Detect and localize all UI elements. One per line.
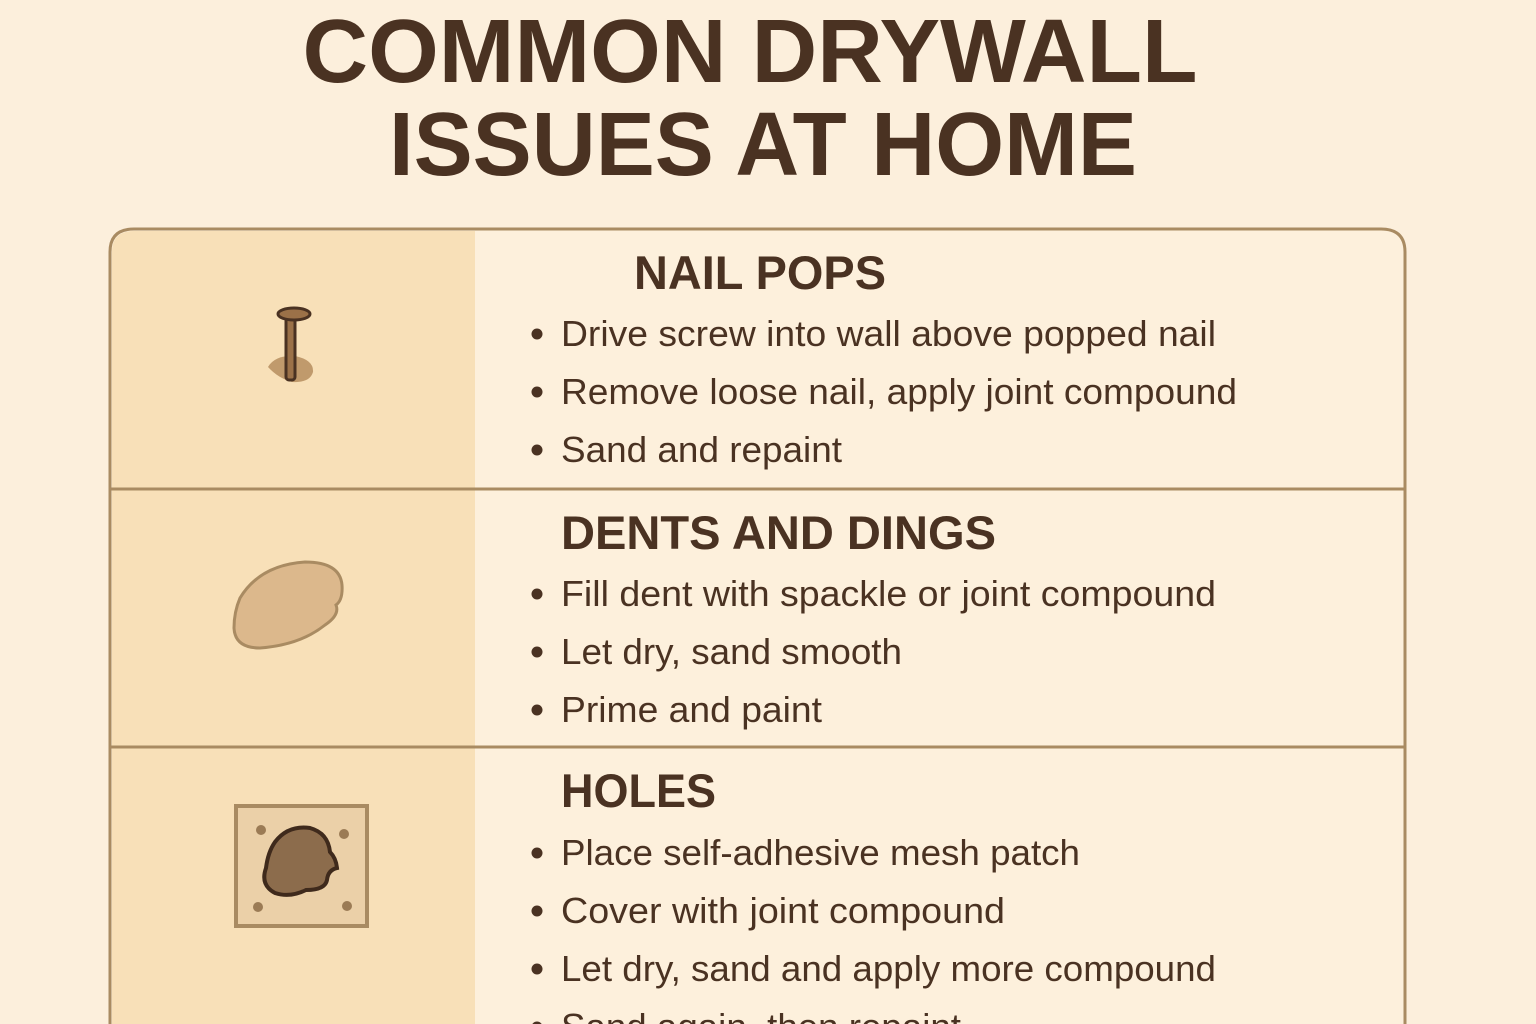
heading: dents and dings: DENTS AND DINGS: [561, 506, 996, 559]
list: nail pops steps: [532, 313, 1237, 470]
icon: dent: [234, 562, 342, 648]
heading: holes: HOLES: [561, 764, 716, 817]
title: [302, 2, 1198, 195]
panel: issues table: [110, 229, 1405, 1024]
list: holes steps: [532, 832, 1216, 1024]
list: holes steps: Cover with joint compound: [561, 890, 1005, 931]
list: dents steps: [532, 573, 1216, 730]
title: ISSUES AT HOME: [389, 95, 1137, 195]
row: holes: [236, 764, 1216, 1024]
icon: nail: [268, 308, 313, 382]
row: nail pops: [268, 246, 1237, 470]
heading: nail pops: NAIL POPS: [634, 246, 886, 299]
list: holes steps: Let dry, sand and apply more compound: [561, 948, 1216, 989]
list: dents steps: Prime and paint: [561, 689, 822, 730]
icon: mesh patch over hole: [236, 806, 367, 926]
list: dents steps: Let dry, sand smooth: [561, 631, 902, 672]
list: nail pops steps: Remove loose nail, apply joint compound: [561, 371, 1237, 412]
list: nail pops steps: Sand and repaint: [561, 429, 842, 470]
list: holes steps: Place self-adhesive mesh patch: [561, 832, 1080, 873]
row: dents and dings: [234, 506, 1216, 730]
list: nail pops steps: Drive screw into wall above popped nail: [561, 313, 1216, 354]
list: dents steps: Fill dent with spackle or joint compound: [561, 573, 1216, 614]
title: COMMON DRYWALL: [302, 2, 1198, 102]
